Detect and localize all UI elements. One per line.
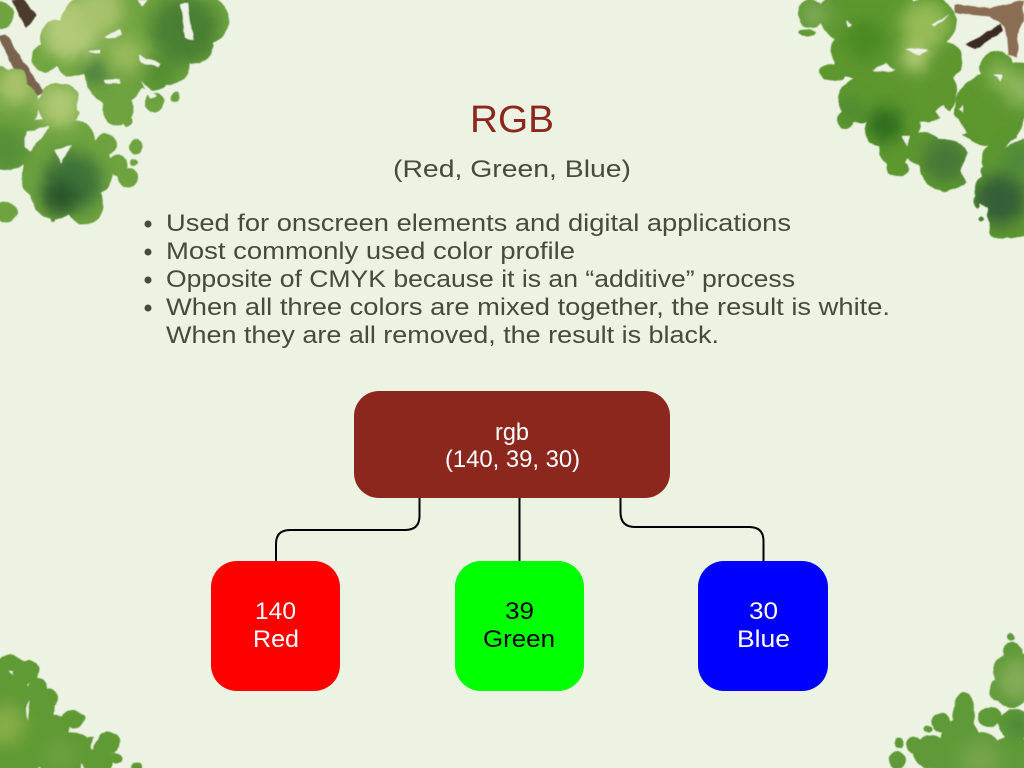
node: rgb value bbox=[354, 391, 670, 498]
foliage: top left corner bbox=[0, 0, 230, 226]
node: green: 39 bbox=[505, 598, 534, 625]
node: red bbox=[211, 561, 340, 691]
bullet list bbox=[144, 210, 890, 349]
bullet list: Most commonly used color profile bbox=[166, 238, 575, 265]
foliage: bottom left corner bbox=[0, 650, 150, 768]
node: green: Green bbox=[483, 626, 555, 653]
subtitle: (Red, Green, Blue) bbox=[393, 156, 631, 183]
foliage: bottom right corner bbox=[880, 630, 1024, 768]
node: red: Red bbox=[253, 626, 299, 653]
bullet list: Used for onscreen elements and digital applications bbox=[166, 210, 791, 237]
bullet list: Opposite of CMYK because it is an “additive” process bbox=[166, 266, 795, 293]
connector: rgb to red bbox=[276, 498, 420, 561]
connector: rgb to blue bbox=[620, 498, 764, 561]
node: red: 140 bbox=[255, 598, 296, 625]
node: blue: Blue bbox=[737, 626, 790, 653]
node: green bbox=[455, 561, 584, 691]
bullet list: When they are all removed, the result is black. bbox=[166, 322, 719, 349]
node: rgb value: (140, 39, 30) bbox=[445, 446, 580, 473]
connector: rgb to green bbox=[518, 498, 520, 561]
node: blue: 30 bbox=[749, 598, 778, 625]
bullet list: When all three colors are mixed together, the result is white. bbox=[166, 294, 890, 321]
node: blue bbox=[698, 561, 828, 691]
title: RGB bbox=[470, 99, 554, 141]
foliage: top right corner bbox=[790, 0, 1024, 240]
node: rgb value: rgb bbox=[495, 419, 529, 446]
